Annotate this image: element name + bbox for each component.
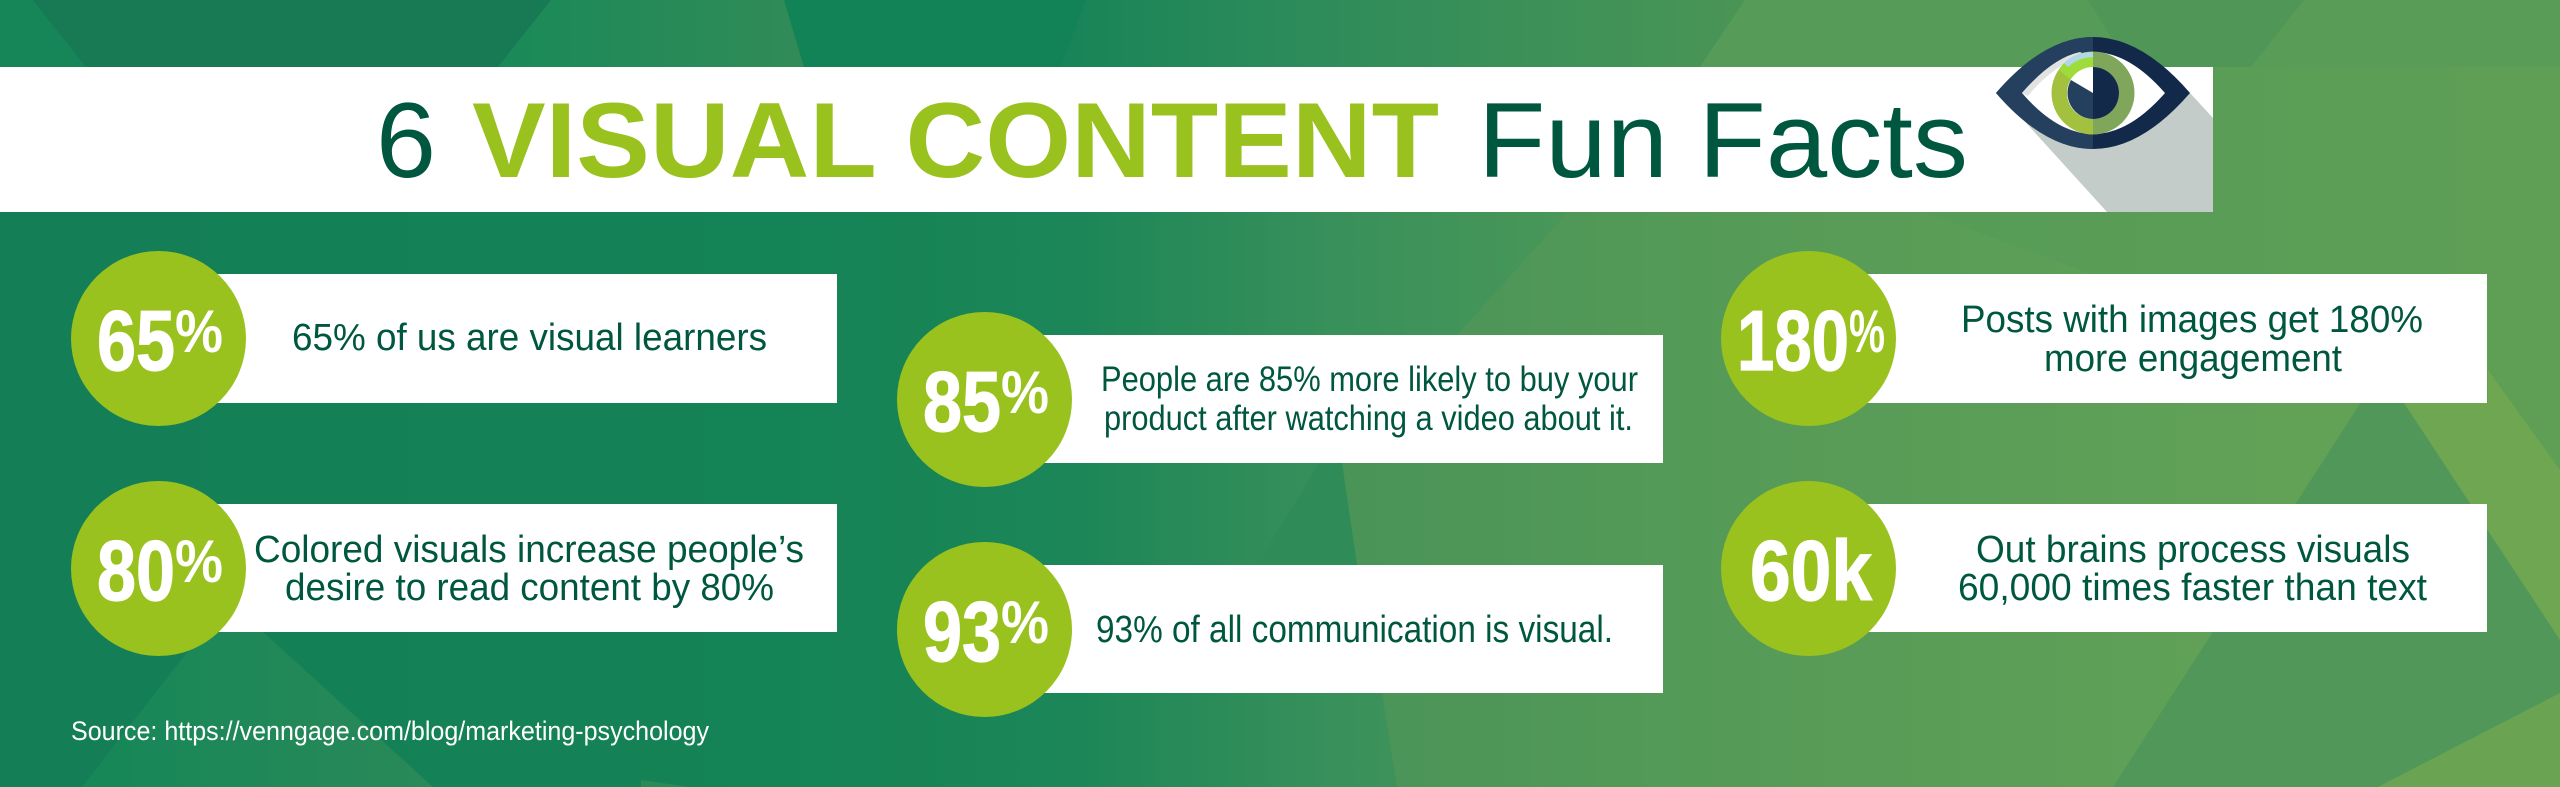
fact text: Out brains process visuals xyxy=(1976,529,2410,571)
title banner xyxy=(0,67,2213,212)
fact text: product after watching a video about it. xyxy=(1104,399,1633,438)
panel: 85% product video xyxy=(897,312,1663,487)
stat: 93%: 93 xyxy=(923,585,1001,680)
fact text: 60,000 times faster than text xyxy=(1958,567,2427,609)
stat: 85%: % xyxy=(1001,359,1049,426)
icon: eye with long shadow xyxy=(1996,37,2213,212)
fact text: Colored visuals increase people’s xyxy=(254,529,804,571)
fact text xyxy=(1958,529,2427,609)
fact text: Posts with images get 180% xyxy=(1961,299,2423,341)
stat: 93%: % xyxy=(1001,589,1049,656)
fact text xyxy=(254,529,804,609)
fact text: desire to read content by 80% xyxy=(285,567,774,609)
panel: 60k processing speed xyxy=(1721,481,2487,656)
title text xyxy=(376,80,1968,200)
fact text: People are 85% more likely to buy your xyxy=(1101,360,1638,399)
fact text xyxy=(1961,299,2423,380)
panel: 65% visual learners xyxy=(71,251,837,426)
stat: 65%: % xyxy=(175,298,223,365)
stat: 180%: % xyxy=(1849,298,1885,365)
fact text: 93% of all communication is visual. xyxy=(1096,609,1613,651)
title text: Fun Facts xyxy=(1478,80,1968,200)
fact text xyxy=(1101,360,1638,438)
source note: Source: https://venngage.com/blog/marketing-psychology xyxy=(71,716,709,746)
stat: 80%: 80 xyxy=(97,524,175,619)
panel: 180% engagement xyxy=(1721,251,2487,426)
fact text: more engagement xyxy=(2044,338,2342,380)
stat: 180%: 180 xyxy=(1737,294,1849,389)
panel: 80% colored visuals xyxy=(71,481,837,656)
stat: 60k: 60k xyxy=(1750,524,1873,619)
title text: 6 xyxy=(376,80,436,200)
panel: 93% communication xyxy=(897,542,1663,717)
title text: VISUAL CONTENT xyxy=(472,80,1439,200)
stat: 65%: 65 xyxy=(97,294,175,389)
fact text: 65% of us are visual learners xyxy=(292,317,767,359)
stat: 85%: 85 xyxy=(923,355,1001,450)
stat: 80%: % xyxy=(175,528,223,595)
